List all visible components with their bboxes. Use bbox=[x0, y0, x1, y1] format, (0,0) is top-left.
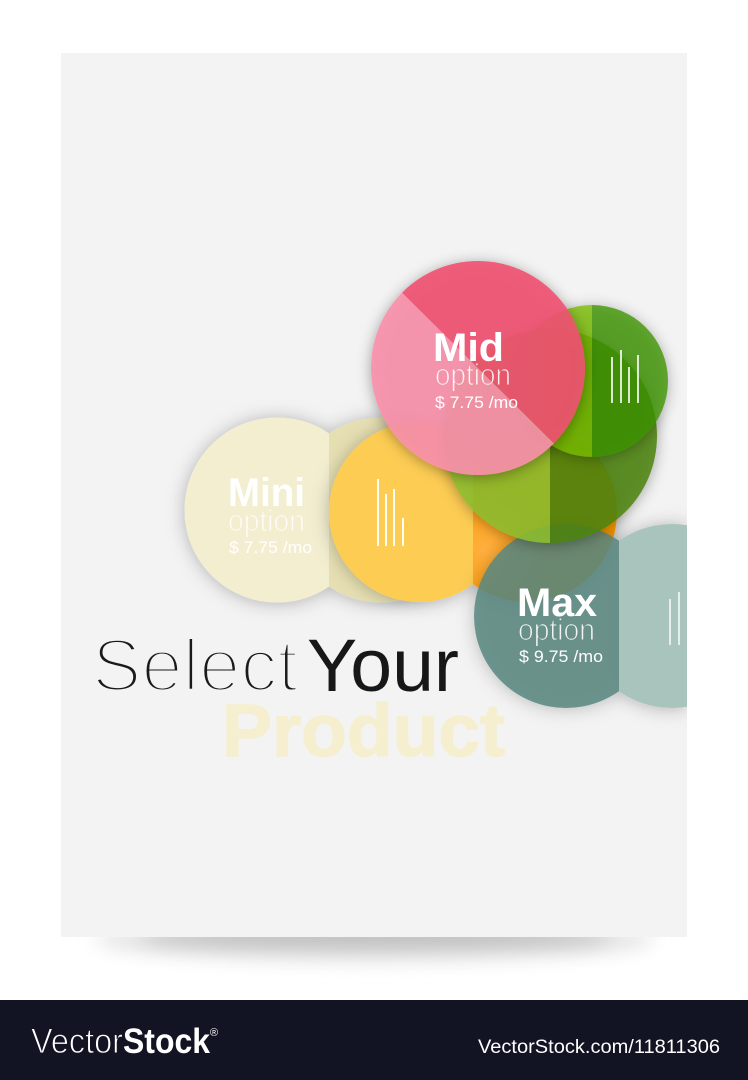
heading: your: Your bbox=[307, 624, 459, 707]
label: mini: Mini bbox=[228, 471, 305, 515]
large green circle bbox=[443, 329, 657, 543]
footer logo: Vector bbox=[31, 1022, 123, 1061]
panel shadow bbox=[95, 918, 655, 962]
label: max: $ 9.75 /mo bbox=[519, 648, 603, 666]
small green circle bbox=[516, 305, 668, 457]
label: max: option bbox=[518, 612, 595, 647]
label: mini: option bbox=[228, 503, 305, 538]
label: mid: $ 7.75 /mo bbox=[435, 394, 518, 412]
footer logo: ® bbox=[210, 1027, 218, 1039]
label: mid bbox=[433, 326, 518, 412]
label: max bbox=[517, 581, 603, 666]
label: mini: $ 7.75 /mo bbox=[229, 539, 312, 557]
option: mini circles bbox=[184, 418, 474, 602]
label: mid: Mid bbox=[433, 326, 504, 370]
footer url: VectorStock.com/11811306 bbox=[478, 1036, 720, 1058]
footer bar bbox=[0, 1000, 748, 1080]
label: mini bbox=[228, 471, 312, 557]
heading: product: Product bbox=[222, 689, 505, 772]
label: mid: option bbox=[435, 357, 511, 392]
yellow and orange circles bbox=[329, 422, 617, 602]
option: max circles bbox=[465, 516, 687, 718]
label: max: Max bbox=[517, 581, 597, 625]
footer logo: Stock bbox=[123, 1022, 210, 1061]
option: mid pink circle bbox=[371, 261, 585, 475]
icon: yellow bars bbox=[378, 479, 403, 546]
footer logo bbox=[31, 1022, 218, 1061]
icon: max bars bbox=[670, 592, 679, 645]
panel: poster sheet bbox=[61, 53, 687, 937]
icon: green bars bbox=[612, 350, 638, 403]
heading: select: Select bbox=[92, 624, 298, 707]
